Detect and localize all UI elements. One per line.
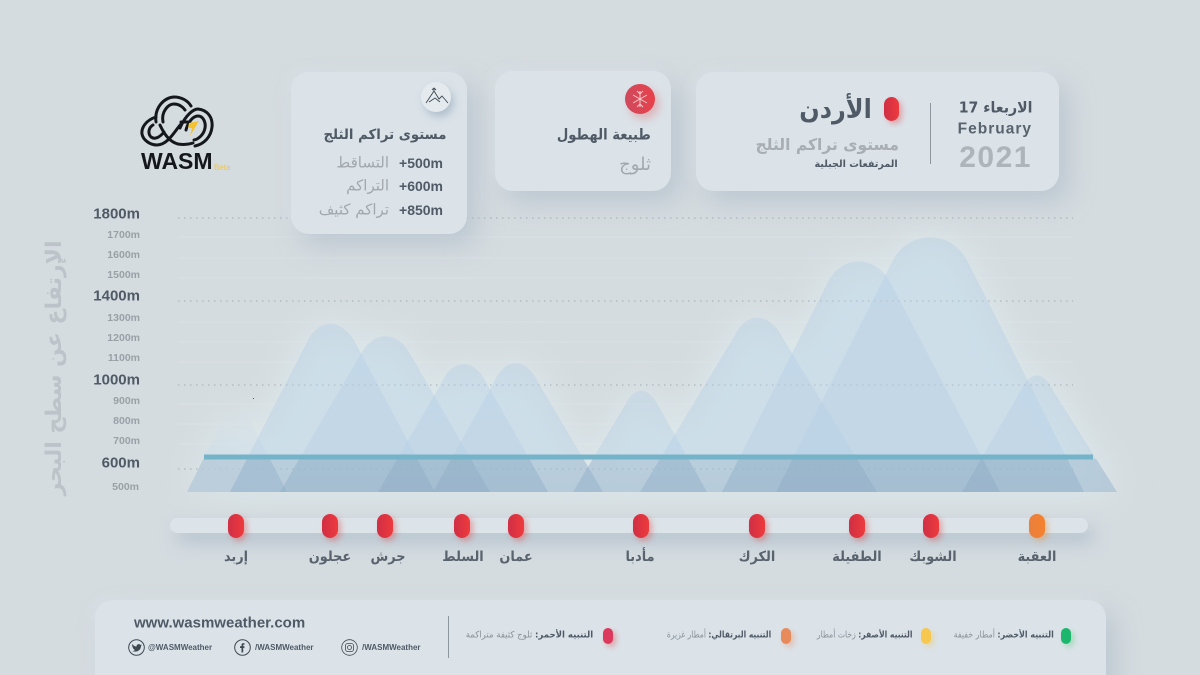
region: المرتفعات الجبلية — [815, 159, 898, 170]
heading: مستوى تراكم الثلج — [323, 127, 446, 143]
legend: red: التنبيه الأحمر: ثلوج كثيفة متراكمة — [466, 630, 593, 640]
panel: date and region — [696, 72, 1059, 191]
row 600: التراكم — [346, 176, 389, 194]
city: Irbid: إربد — [224, 549, 248, 565]
country: الأردن — [800, 95, 872, 125]
legend: red — [466, 628, 619, 650]
city: Salt: السلط — [442, 549, 484, 565]
city: Tafila: الطفيلة — [832, 549, 882, 565]
timeline track — [170, 518, 1088, 533]
alert pill — [884, 97, 899, 121]
row 850: +850m — [399, 202, 443, 218]
divider — [930, 103, 931, 164]
row 850 — [319, 200, 443, 218]
icon: facebook — [234, 639, 314, 656]
city: Tafila — [832, 514, 882, 565]
y axis labels: 1700m — [107, 229, 140, 241]
y axis labels: 1500m — [107, 269, 140, 281]
row 850: تراكم كثيف — [319, 200, 389, 218]
y axis labels: 700m — [113, 435, 140, 447]
city: Shoubak: الشوبك — [909, 549, 957, 565]
panel: precipitation type — [495, 71, 671, 191]
peaks — [187, 237, 1117, 492]
icon: instagram: /WASMWeather — [362, 643, 421, 652]
icon: instagram — [341, 639, 421, 656]
city: Irbid — [224, 514, 250, 565]
website: www.wasmweather.com — [134, 614, 305, 632]
heading: طبيعة الهطول — [557, 126, 651, 144]
city: Aqaba: العقبة — [1018, 549, 1056, 565]
city: Jerash — [370, 514, 406, 565]
snow line — [204, 454, 1093, 460]
y axis labels: 800m — [113, 415, 140, 427]
y axis labels: 1200m — [107, 332, 140, 344]
y axis labels: 1600m — [107, 249, 140, 261]
month: February — [958, 120, 1032, 137]
icon: snowflake — [625, 84, 655, 114]
city: Karak: الكرك — [739, 549, 775, 565]
city: Amman — [499, 514, 533, 565]
year: 2021 — [959, 141, 1032, 174]
y axis labels: 1400m — [93, 288, 140, 304]
row 600 — [346, 176, 443, 194]
y axis labels: 1300m — [107, 312, 140, 324]
city: Ajloun: عجلون — [309, 549, 351, 565]
city: Aqaba — [1018, 514, 1056, 565]
mountain chart — [178, 218, 1117, 492]
y axis labels: 500m — [112, 481, 139, 493]
logo wordmark: WASM — [141, 148, 213, 174]
row 500: التساقط — [336, 154, 389, 172]
glow — [187, 237, 1117, 492]
y axis labels: 600m — [102, 454, 140, 472]
logo mark — [140, 96, 214, 148]
grid lines — [178, 237, 1073, 444]
city: Amman: عمان — [499, 549, 533, 565]
date line: الاربعاء 17 — [958, 98, 1032, 116]
panel: footer — [95, 600, 1106, 675]
city: Jerash: جرش — [370, 549, 406, 565]
legend: green — [954, 628, 1077, 649]
divider — [448, 616, 449, 658]
row 600: +600m — [399, 178, 443, 194]
panel: snow accumulation levels — [291, 72, 467, 234]
beta tag: Beta — [214, 163, 230, 172]
icon: twitter: @WASMWeather — [148, 643, 212, 652]
row 500: +500m — [399, 155, 443, 171]
legend: orange — [667, 628, 797, 649]
y axis labels: 900m — [113, 395, 140, 407]
city: Madaba — [625, 514, 656, 565]
subtitle: مستوى تراكم الثلج — [756, 135, 899, 154]
icon: twitter — [128, 639, 212, 656]
y axis title: الإرتفاع عن سطح البحر — [42, 240, 67, 496]
legend: green: التنبيه الأخضر: أمطار خفيفة — [954, 630, 1054, 640]
city: Karak — [739, 514, 775, 565]
row 500 — [336, 154, 443, 172]
y axis labels: 1000m — [93, 372, 140, 388]
legend: yellow — [816, 628, 937, 649]
y axis labels: 1100m — [108, 352, 140, 364]
peaks below snow line — [187, 459, 1117, 492]
y axis labels — [93, 206, 140, 493]
legend: yellow: التنبيه الأصفر: زخات أمطار — [817, 630, 913, 640]
city: Shoubak — [909, 514, 957, 565]
legend: orange: التنبيه البرتقالي: أمطار غزيرة — [667, 630, 771, 640]
city: Madaba: مأدبا — [625, 549, 655, 565]
city: Ajloun — [309, 514, 351, 565]
logo — [140, 96, 230, 174]
value: ثلوج — [619, 154, 651, 175]
icon: facebook: /WASMWeather — [255, 643, 314, 652]
y axis labels: 1800m — [93, 206, 140, 222]
icon: mountain — [421, 82, 451, 112]
city: Salt — [442, 514, 484, 565]
